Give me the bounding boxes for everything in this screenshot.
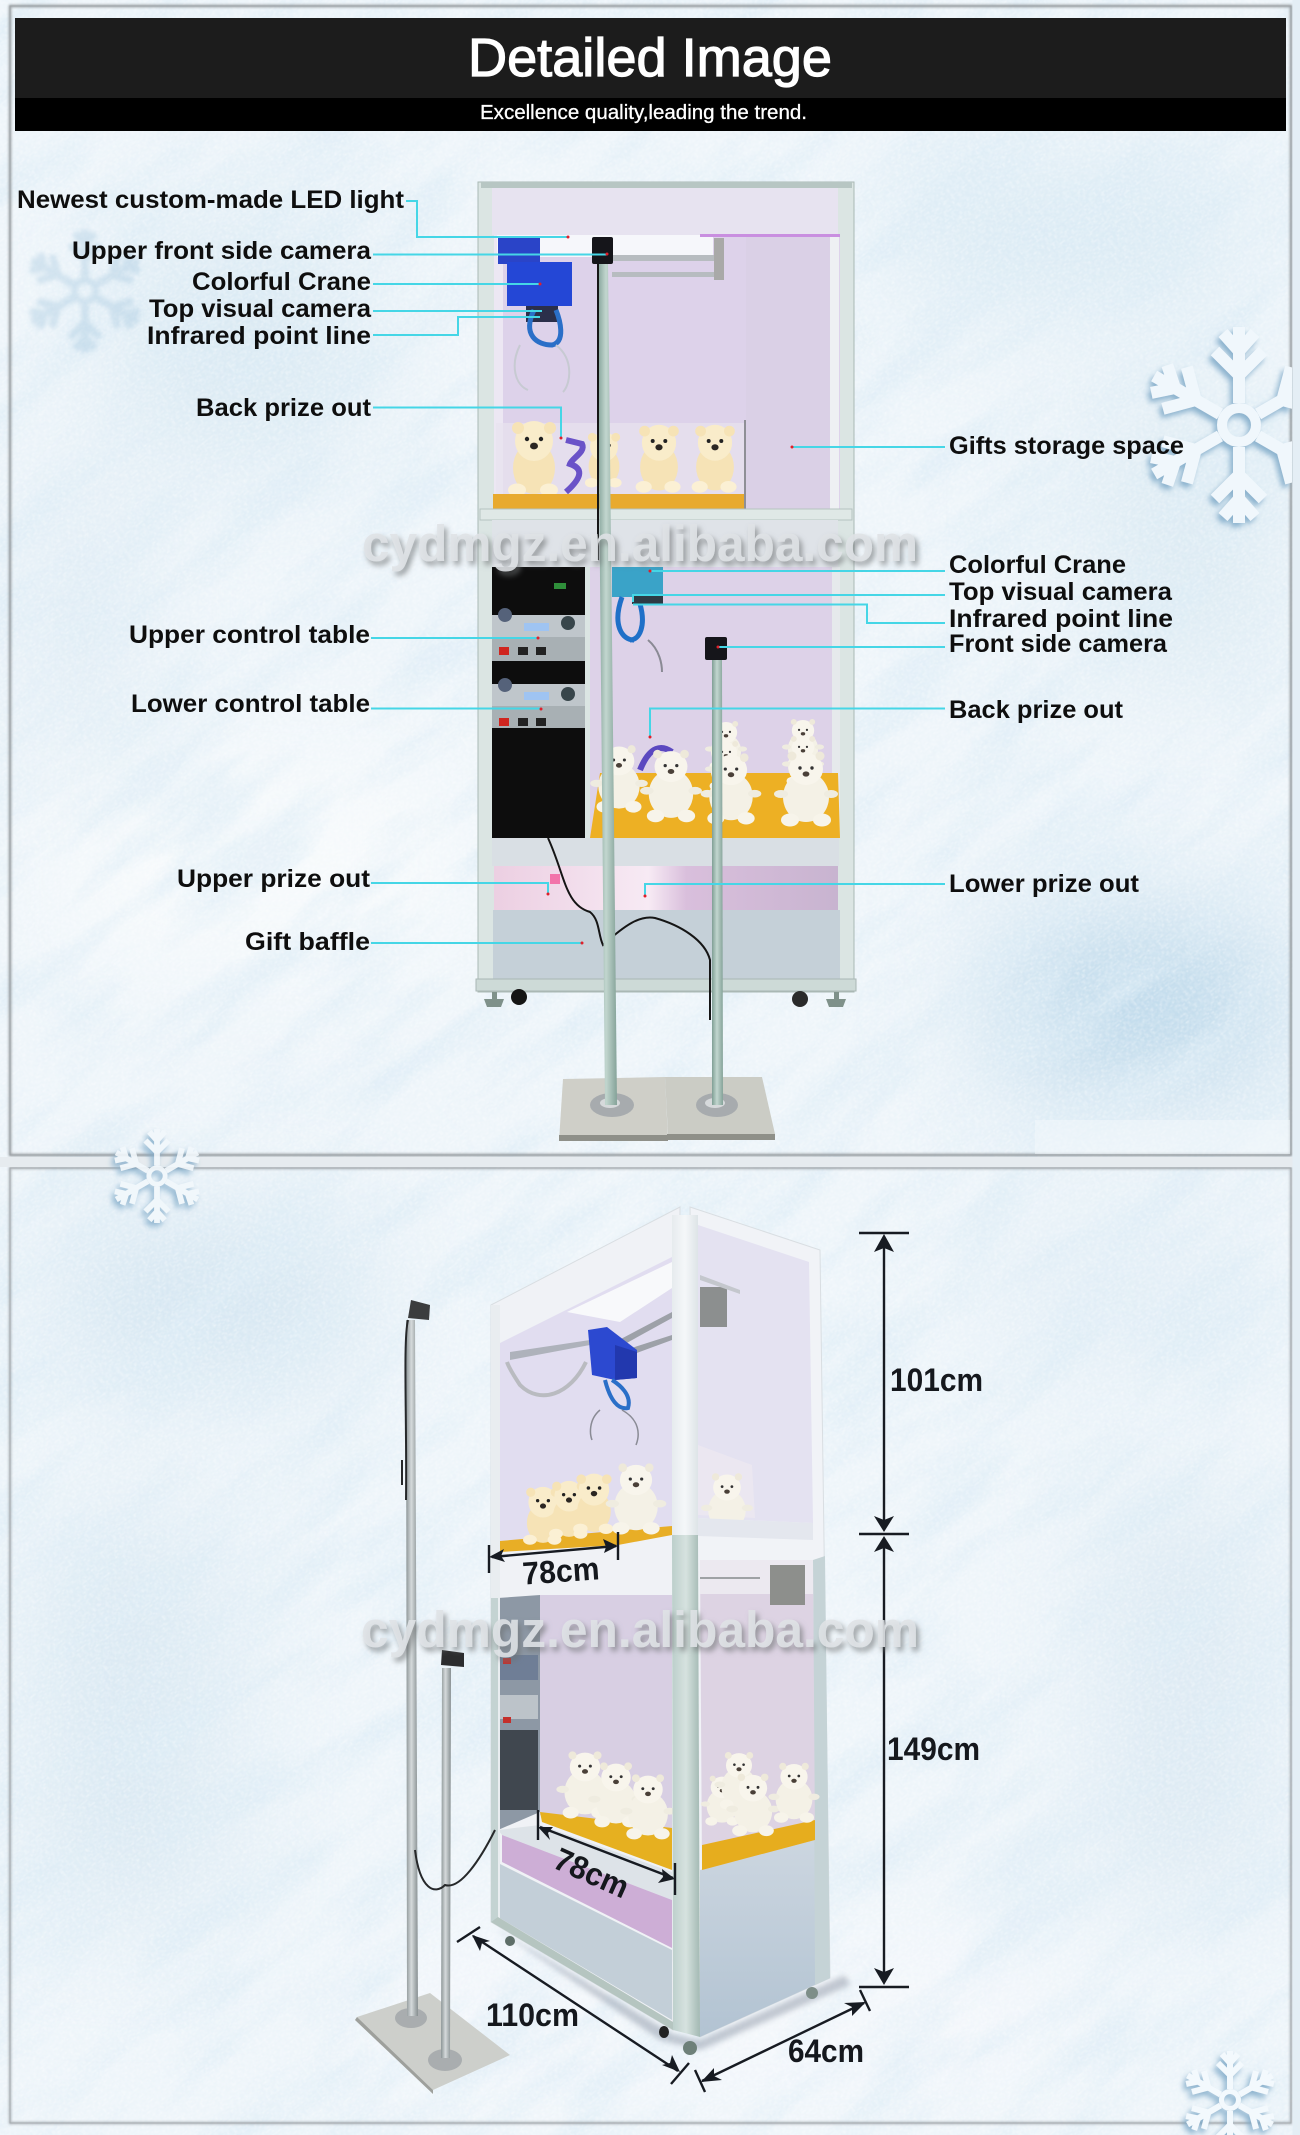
callout lines: left: [371, 201, 608, 944]
power cable: [548, 838, 710, 1020]
crane: upper: [498, 238, 572, 392]
dimension: depth: 110cm: [486, 1997, 579, 2033]
labels: left: Top visual camera: [149, 295, 372, 323]
front band: [498, 1825, 672, 1900]
labels: left: Infrared point line: [147, 322, 371, 350]
upper chamber: [494, 234, 840, 509]
labels: left: Colorful Crane: [192, 268, 371, 296]
labels: left: Upper control table: [129, 621, 370, 649]
plush toys: upper: [508, 421, 737, 496]
right post lower: [813, 1556, 830, 1985]
lighter strip at bottom of top panel: [1035, 1120, 1290, 1154]
glass partition: [744, 420, 746, 509]
upper header plate: [492, 188, 838, 235]
camera pole: right: [712, 660, 723, 1105]
camera: lower: [705, 637, 727, 660]
panel frame: bottom: [10, 1168, 1291, 2123]
shelf ledge right: [698, 1518, 813, 1540]
lower plate: [492, 838, 839, 866]
subtitle: Excellence quality,leading the trend.: [480, 102, 807, 124]
crane: lower: [612, 567, 663, 672]
dimension: upper width: [489, 1532, 618, 1592]
dimension: side: 64cm: [788, 2033, 864, 2069]
prize compartment: [502, 1835, 672, 1948]
labels: right: Front side camera: [949, 630, 1168, 658]
feet: [505, 1936, 818, 2055]
labels: right: Gifts storage space: [949, 432, 1184, 460]
base rail: [491, 1917, 673, 2030]
snowflake: second panel top left: [111, 1129, 203, 1223]
machine: perspective view: [491, 1207, 850, 2055]
watermark: bottom: cydmgz.en.alibaba.com: [361, 1601, 919, 1658]
dimension: upper width: 78cm: [521, 1550, 601, 1592]
left column lower: [491, 1598, 498, 1922]
control panel: perspective: [498, 1595, 540, 1830]
labels: left: Newest custom-made LED light: [17, 186, 405, 214]
label: 149cm: 149cm: [887, 1731, 980, 1767]
dimension: side: [695, 1990, 870, 2092]
lower left window: [540, 1595, 672, 1860]
watermark: top: cydmgz.en.alibaba.com: [362, 515, 918, 572]
dimension: lower width: 78cm: [549, 1841, 635, 1905]
left face: [491, 1207, 680, 2030]
plush toys: perspective lower: [556, 1751, 820, 1839]
yellow shelf: upper: [500, 1526, 672, 1552]
header: subtitle band: [15, 98, 1286, 131]
floor shadow: [491, 1925, 850, 2050]
labels: left: [17, 186, 405, 956]
labels: left: Upper front side camera: [72, 237, 372, 265]
camera pole: short: [441, 1668, 451, 2058]
cabinet frame: [478, 182, 854, 992]
upper right window: [698, 1225, 813, 1523]
labels: left: Back prize out: [196, 394, 372, 422]
snowflake: top left faint: [24, 229, 146, 353]
lower right window: [700, 1560, 815, 1870]
header: title band: [15, 18, 1286, 98]
gift baffle: [493, 910, 840, 979]
labels: left: Upper prize out: [177, 865, 371, 893]
camera: upper: [592, 237, 613, 264]
base rail: [476, 979, 856, 991]
prize out windows: [494, 866, 838, 910]
right face lower panel: [700, 1840, 830, 2037]
yellow shelf: upper: [493, 494, 746, 509]
label: 101cm: 101cm: [890, 1362, 983, 1398]
plush toys: lower: [590, 719, 840, 838]
labels: left: Gift baffle: [245, 928, 370, 956]
corner post: upper: [672, 1215, 698, 1535]
left column: [491, 1305, 500, 1922]
snowflake: bottom right: [1180, 2050, 1280, 2135]
feet and wheels: [484, 989, 846, 1007]
plush toys: perspective upper: [523, 1463, 753, 1545]
gap between panels: [0, 1157, 1300, 1167]
camera pole: tall: [406, 1320, 418, 2016]
camera: short: [441, 1650, 464, 1667]
lower header plate: [492, 520, 838, 567]
corner post: lower: [672, 1535, 700, 2037]
labels: left: Lower control table: [131, 690, 370, 718]
yellow shelf: lower: [540, 1812, 815, 1870]
lower chamber: [590, 567, 840, 838]
dimension: vertical: [859, 1233, 983, 1987]
title: Detailed Image: [468, 28, 832, 88]
camera cables: [402, 1320, 495, 1889]
camera: tall: [408, 1300, 430, 1320]
camera pole: left: [597, 262, 617, 1105]
machine: front view: [476, 182, 856, 1020]
right margin strip: [1292, 0, 1300, 2135]
floor stands: front view: [559, 237, 775, 1141]
middle divider: [480, 509, 852, 520]
labels: right: Infrared point line: [949, 605, 1173, 633]
control table: [492, 567, 585, 838]
upper left window: [500, 1257, 672, 1552]
floor stands: perspective view: [355, 1300, 510, 2094]
labels: right: Colorful Crane: [949, 551, 1126, 579]
snowflake: top right: [1139, 325, 1292, 525]
dimension: depth: [457, 1927, 689, 2084]
callout lines: right: [633, 446, 945, 898]
right face: [690, 1207, 830, 2037]
crane: perspective: [507, 1327, 638, 1445]
labels: right: Lower prize out: [949, 870, 1140, 898]
panel frame: top: [10, 6, 1291, 1155]
labels: right: [949, 432, 1184, 898]
baffle: [498, 1863, 672, 2020]
dimension: lower width: [538, 1810, 675, 1905]
labels: right: Top visual camera: [949, 578, 1173, 606]
labels: right: Back prize out: [949, 696, 1124, 724]
